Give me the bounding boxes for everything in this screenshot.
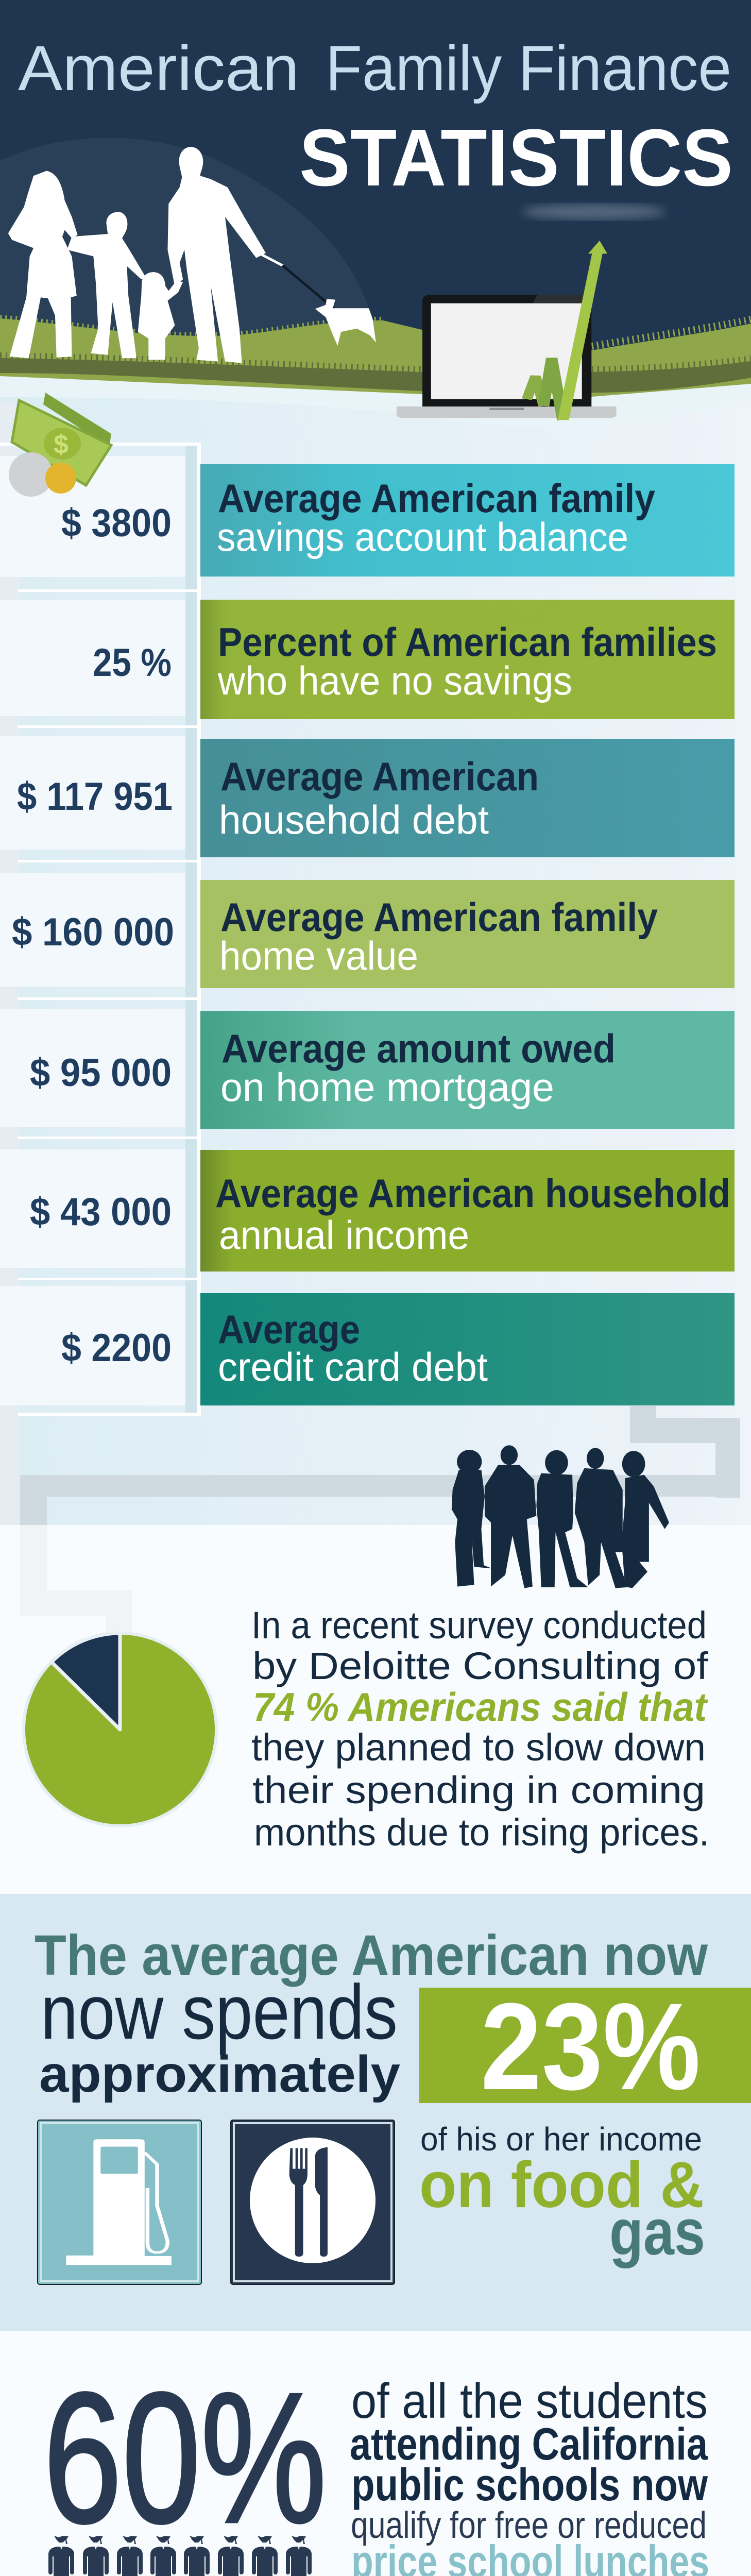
row: household debt [0,736,735,857]
callout 23%: 23% [481,1977,701,2115]
survey text: months due to rising prices. [254,1811,709,1854]
pie chart 74% [24,1633,216,1826]
man [167,147,266,363]
survey text: 74 % Americans said that [253,1684,708,1730]
survey text: their spending in coming [252,1769,705,1811]
dog [315,299,376,346]
income text: of his or her income [420,2121,702,2158]
spends text: now spends [41,1969,398,2055]
survey text: In a recent survey conducted [251,1604,707,1647]
row: household debt: $ 117 951 [17,775,173,819]
panel: header [0,0,751,420]
icon: fork and knife [231,2120,395,2284]
row: home mortgage: on home mortgage [220,1064,554,1110]
row: household debt: household debt [219,797,489,842]
row: savings account balance: $ 3800 [61,501,172,545]
faded bracket [20,1525,132,1633]
decorative bracket: upper [20,1406,740,1525]
on food and gas: gas [609,2196,705,2268]
row: annual income: $ 43 000 [30,1190,172,1234]
students text [350,2374,709,2576]
icon: money and coins: $ [54,430,69,460]
row: savings account balance [0,456,735,577]
panel: lower white background [0,2331,751,2576]
row: credit card debt: Average [218,1307,360,1352]
row: home mortgage: $ 95 000 [30,1051,172,1095]
toddler [138,272,183,360]
woman [8,171,78,358]
students text: of all the students [351,2374,708,2429]
panel: number cards frame [0,443,201,1416]
row: household debt: Average American [220,754,539,799]
survey text [251,1604,709,1854]
row: home value [0,873,735,988]
survey text: they planned to slow down [251,1726,706,1769]
row: no savings: who have no savings [217,658,572,703]
row: home value: Average American family [220,894,658,940]
title line 1: Family Finance [326,33,731,104]
row: no savings: 25 % [93,641,172,685]
people silhouette [452,1445,669,1588]
statistic: 60%: 60% [43,2354,327,2562]
panel: light blue statistics background [0,361,751,1525]
panel: survey [0,1445,751,1894]
row: home value: $ 160 000 [12,910,174,954]
survey text: by Deloitte Consulting of [252,1645,708,1687]
on food and gas: on food & [419,2148,704,2221]
icon: fuel pump [38,2120,201,2284]
row: credit card debt: credit card debt [218,1344,488,1389]
panel: food and gas [0,1894,751,2331]
row: savings account balance: savings account balance [217,514,628,560]
grass hill [0,318,751,397]
heading: The average American now [35,1924,708,1987]
icon: money and coins [9,393,111,497]
family silhouette [8,147,376,363]
row: credit card debt [0,1286,735,1405]
row: home mortgage: Average amount owed [221,1026,616,1071]
title line 1 [18,33,731,104]
laptop with rising arrow [397,241,617,420]
spends text: approximately [39,2045,400,2103]
row: credit card debt: $ 2200 [61,1326,172,1370]
row: savings account balance: Average American family [218,476,655,521]
row: home mortgage [0,1009,735,1129]
title line 1: American [18,33,299,104]
title line 2: STATISTICS [299,113,733,203]
on food and gas [419,2148,705,2268]
row: annual income: annual income [219,1212,469,1258]
row: no savings [0,600,735,719]
boy [67,212,146,358]
row: annual income [0,1149,735,1272]
header halo [0,138,372,361]
row: home value: home value [219,933,418,978]
pictogram: students row 1 [48,2536,312,2576]
header glow [522,204,666,219]
spends text [39,1969,400,2103]
leash [259,253,283,265]
